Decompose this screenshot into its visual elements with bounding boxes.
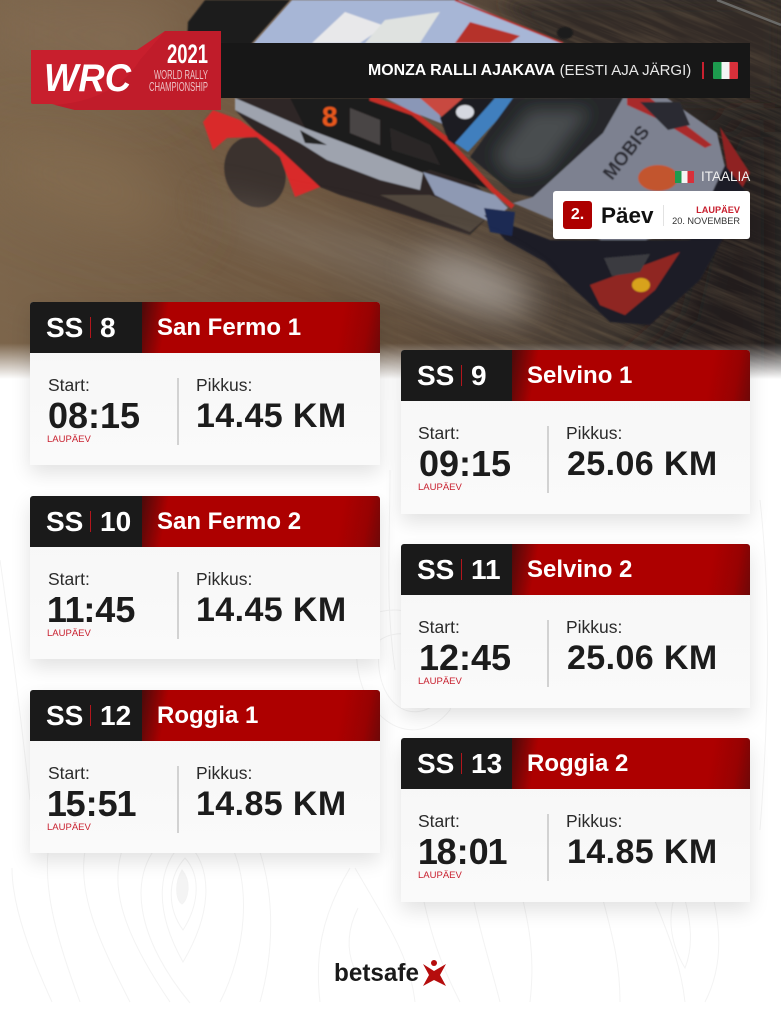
panel: SS 8: 8 bbox=[100, 312, 116, 343]
WRC logo bbox=[31, 31, 221, 110]
panel: SS 9: Selvino 1 bbox=[527, 362, 632, 389]
panel: SS 13: 18:01 bbox=[418, 831, 508, 872]
car: roof bbox=[252, 0, 565, 45]
panel: SS 12: Start: bbox=[48, 763, 90, 783]
panel: SS 9: 25.06 KM bbox=[567, 445, 718, 483]
panel: SS 13: 13 bbox=[471, 748, 502, 779]
panel: SS 8: San Fermo 1 bbox=[157, 314, 301, 341]
panel: SS 10: 10 bbox=[100, 506, 131, 537]
panel: SS 10: Start: bbox=[48, 569, 90, 589]
panel: SS 8: Start: bbox=[48, 375, 90, 395]
car: red rear fender bbox=[203, 110, 320, 197]
panel: SS 10: 11:45 bbox=[47, 589, 135, 630]
car bbox=[187, 0, 750, 325]
panel: SS 13: SS bbox=[417, 748, 454, 779]
WRC logo: 2021 bbox=[167, 39, 208, 69]
car: right fender bbox=[720, 127, 750, 187]
dust cloud bbox=[200, 195, 540, 324]
title divider bbox=[702, 62, 704, 79]
panel: SS 12: Pikkus: bbox=[196, 763, 252, 783]
panel: SS 8 bbox=[30, 302, 380, 465]
panel: SS 10: San Fermo 2 bbox=[157, 508, 301, 535]
panel: SS 9: Start: bbox=[418, 423, 460, 443]
fade to white bbox=[0, 343, 781, 379]
panel: SS 11: Start: bbox=[418, 617, 460, 637]
panel: SS 11: 12:45 bbox=[419, 637, 511, 678]
panel: SS 13: 14.85 KM bbox=[567, 833, 718, 871]
panel: SS 13: Pikkus: bbox=[566, 811, 622, 831]
car: mud sill bbox=[380, 195, 490, 232]
panel: SS 11: 11 bbox=[471, 554, 501, 585]
panel: SS 11: Selvino 2 bbox=[527, 556, 632, 583]
panel: SS 12: SS bbox=[46, 700, 83, 731]
day word: Päev bbox=[601, 203, 654, 228]
panel: SS 12: LAUPÄEV bbox=[47, 822, 91, 833]
panel: SS 13: Roggia 2 bbox=[527, 750, 628, 777]
panel: SS 8: 08:15 bbox=[48, 395, 140, 436]
Betsafe logo: betsafe bbox=[334, 959, 419, 987]
hero photo: rally car on gravel bbox=[0, 0, 781, 378]
car: roof stripes and Asan panel bbox=[385, 98, 445, 125]
location name: ITAALIA bbox=[701, 169, 750, 184]
panel: SS 8: Pikkus: bbox=[196, 375, 252, 395]
car: number 8 door: 8 bbox=[322, 101, 338, 132]
panel: SS 13 bbox=[401, 738, 750, 902]
panel: SS 11 bbox=[401, 544, 750, 708]
panel: SS 9: 9 bbox=[471, 360, 487, 391]
panel: SS 10: 14.45 KM bbox=[196, 591, 347, 629]
panel: SS 8: 14.45 KM bbox=[196, 397, 347, 435]
icon: Italian flag bbox=[713, 62, 738, 79]
panel: SS 9 bbox=[401, 350, 750, 514]
icon: Betsafe figure bbox=[423, 960, 446, 986]
location label bbox=[675, 169, 750, 184]
panel: SS 13: Start: bbox=[418, 811, 460, 831]
panel: SS 12: 14.85 KM bbox=[196, 785, 347, 823]
car: windshield bbox=[470, 98, 623, 197]
panel: SS 13: LAUPÄEV bbox=[418, 870, 462, 881]
car: rear spoiler bbox=[187, 0, 290, 45]
panel: SS 11: Pikkus: bbox=[566, 617, 622, 637]
title text: MONZA RALLI AJAKAVA (EESTI AJA JÄRGI) bbox=[368, 62, 691, 79]
day number bbox=[563, 201, 592, 229]
panel: SS 12: Roggia 1 bbox=[157, 702, 258, 729]
panel: SS 9: SS bbox=[417, 360, 454, 391]
date: 20. NOVEMBER bbox=[672, 216, 740, 226]
panel: SS 9: LAUPÄEV bbox=[418, 482, 462, 493]
title bar bbox=[221, 43, 750, 98]
WRC logo: WRC bbox=[44, 57, 132, 100]
car: side door and window bbox=[290, 98, 493, 190]
day number: 2. bbox=[571, 206, 584, 223]
panel: SS 10 bbox=[30, 496, 380, 659]
icon: Italian flag small bbox=[675, 171, 694, 183]
car: front bumper bbox=[484, 215, 722, 325]
panel: SS 11: LAUPÄEV bbox=[418, 676, 462, 687]
weekday: LAUPÄEV bbox=[696, 205, 740, 215]
panel: SS 11: 25.06 KM bbox=[567, 639, 718, 677]
panel: SS 12: 12 bbox=[100, 700, 131, 731]
car: side panels bbox=[235, 98, 423, 190]
car: hood bbox=[513, 98, 725, 248]
car: upper body bbox=[235, 98, 500, 235]
panel: SS 10: LAUPÄEV bbox=[47, 628, 91, 639]
panel: SS 10: SS bbox=[46, 506, 83, 537]
panel: SS 9: Pikkus: bbox=[566, 423, 622, 443]
panel: SS 11: SS bbox=[417, 554, 454, 585]
badge divider bbox=[663, 205, 664, 226]
car: rear wheel bbox=[214, 128, 296, 216]
panel: SS 9: 09:15 bbox=[419, 443, 511, 484]
panel: SS 8: SS bbox=[46, 312, 83, 343]
panel: SS 8: LAUPÄEV bbox=[47, 434, 91, 445]
panel: SS 10: Pikkus: bbox=[196, 569, 252, 589]
car: sponsor text on hood: MOBIS bbox=[599, 122, 654, 184]
panel: SS 12: 15:51 bbox=[47, 783, 137, 824]
panel: SS 12 bbox=[30, 690, 380, 853]
day badge bbox=[553, 191, 750, 239]
